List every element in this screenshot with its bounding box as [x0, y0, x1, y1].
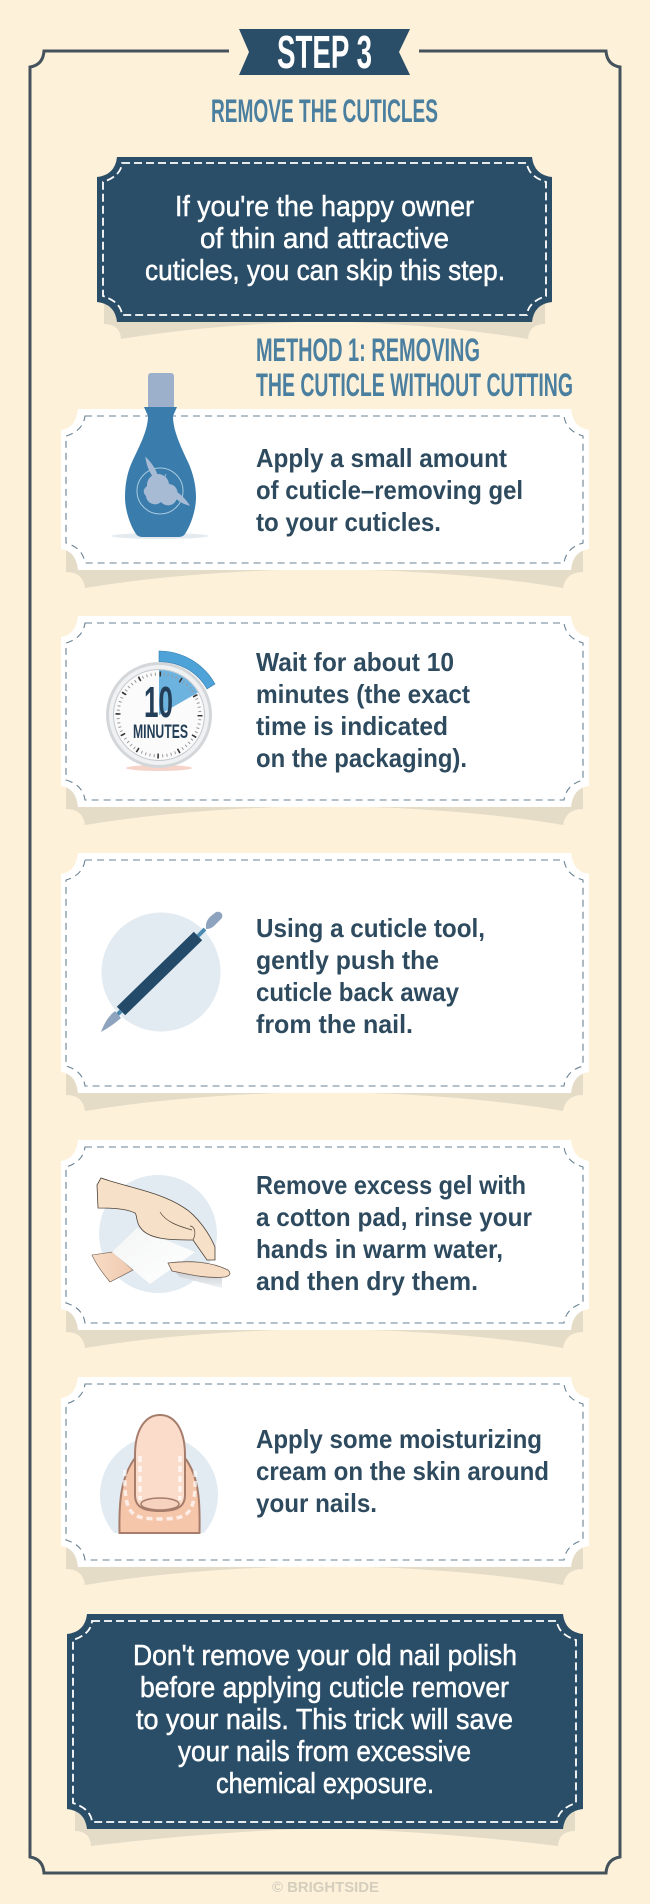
credit: brightside: © BRIGHTSIDE: [272, 1879, 379, 1896]
bottom callout: chemical exposure.: [216, 1768, 434, 1800]
heading: method 1: METHOD 1: REMOVING: [256, 332, 480, 368]
panel: wait: [61, 616, 589, 825]
icon: fingernail: [100, 1415, 218, 1533]
icon: gel bottle: [112, 373, 208, 539]
icon: stopwatch: MINUTES: [133, 722, 188, 743]
icon: stopwatch: [106, 651, 215, 771]
panel: moisturize: your nails.: [256, 1488, 377, 1518]
panel: remove excess gel: hands in warm water,: [256, 1234, 503, 1264]
panel: remove excess gel: [61, 1140, 589, 1348]
icon: hands with cotton pad: [92, 1175, 230, 1293]
ribbon: step 3: STEP 3: [277, 26, 372, 78]
panel: moisturize: Apply some moisturizing: [256, 1424, 542, 1454]
bottom callout: [67, 1614, 583, 1846]
panel: moisturize: [61, 1377, 589, 1585]
intro callout: [97, 157, 552, 339]
panel: wait: minutes (the exact: [256, 679, 470, 709]
icon: stopwatch: 10: [144, 678, 173, 727]
icon: cuticle tool: [101, 912, 222, 1032]
panel: remove excess gel: Remove excess gel with: [256, 1170, 526, 1200]
panel: apply gel: [61, 373, 589, 588]
bottom callout: to your nails. This trick will save: [136, 1704, 513, 1736]
panel: apply gel: of cuticle–removing gel: [256, 475, 523, 505]
panel: push cuticle: from the nail.: [256, 1009, 413, 1039]
bottom callout: Don't remove your old nail polish: [133, 1640, 517, 1672]
intro callout: of thin and attractive: [200, 223, 449, 255]
panel: push cuticle: cuticle back away: [256, 977, 459, 1007]
bottom callout: your nails from excessive: [178, 1736, 471, 1768]
intro callout: If you're the happy owner: [175, 191, 474, 223]
panel: push cuticle: [61, 853, 589, 1111]
heading: method 1: [256, 332, 573, 403]
panel: apply gel: to your cuticles.: [256, 507, 441, 537]
panel: remove excess gel: a cotton pad, rinse your: [256, 1202, 532, 1232]
panel: apply gel: Apply a small amount: [256, 443, 507, 473]
ribbon: step 3: [239, 26, 410, 78]
panel: wait: on the packaging).: [256, 743, 467, 773]
panel: remove excess gel: and then dry them.: [256, 1266, 478, 1296]
intro callout: cuticles, you can skip this step.: [145, 255, 505, 287]
panel: moisturize: cream on the skin around: [256, 1456, 549, 1486]
bottom callout: before applying cuticle remover: [140, 1672, 509, 1704]
heading: remove the cuticles: REMOVE THE CUTICLES: [211, 93, 438, 129]
panel: wait: Wait for about 10: [256, 647, 454, 677]
panel: wait: time is indicated: [256, 711, 448, 741]
panel: push cuticle: Using a cuticle tool,: [256, 913, 485, 943]
panel: push cuticle: gently push the: [256, 945, 439, 975]
